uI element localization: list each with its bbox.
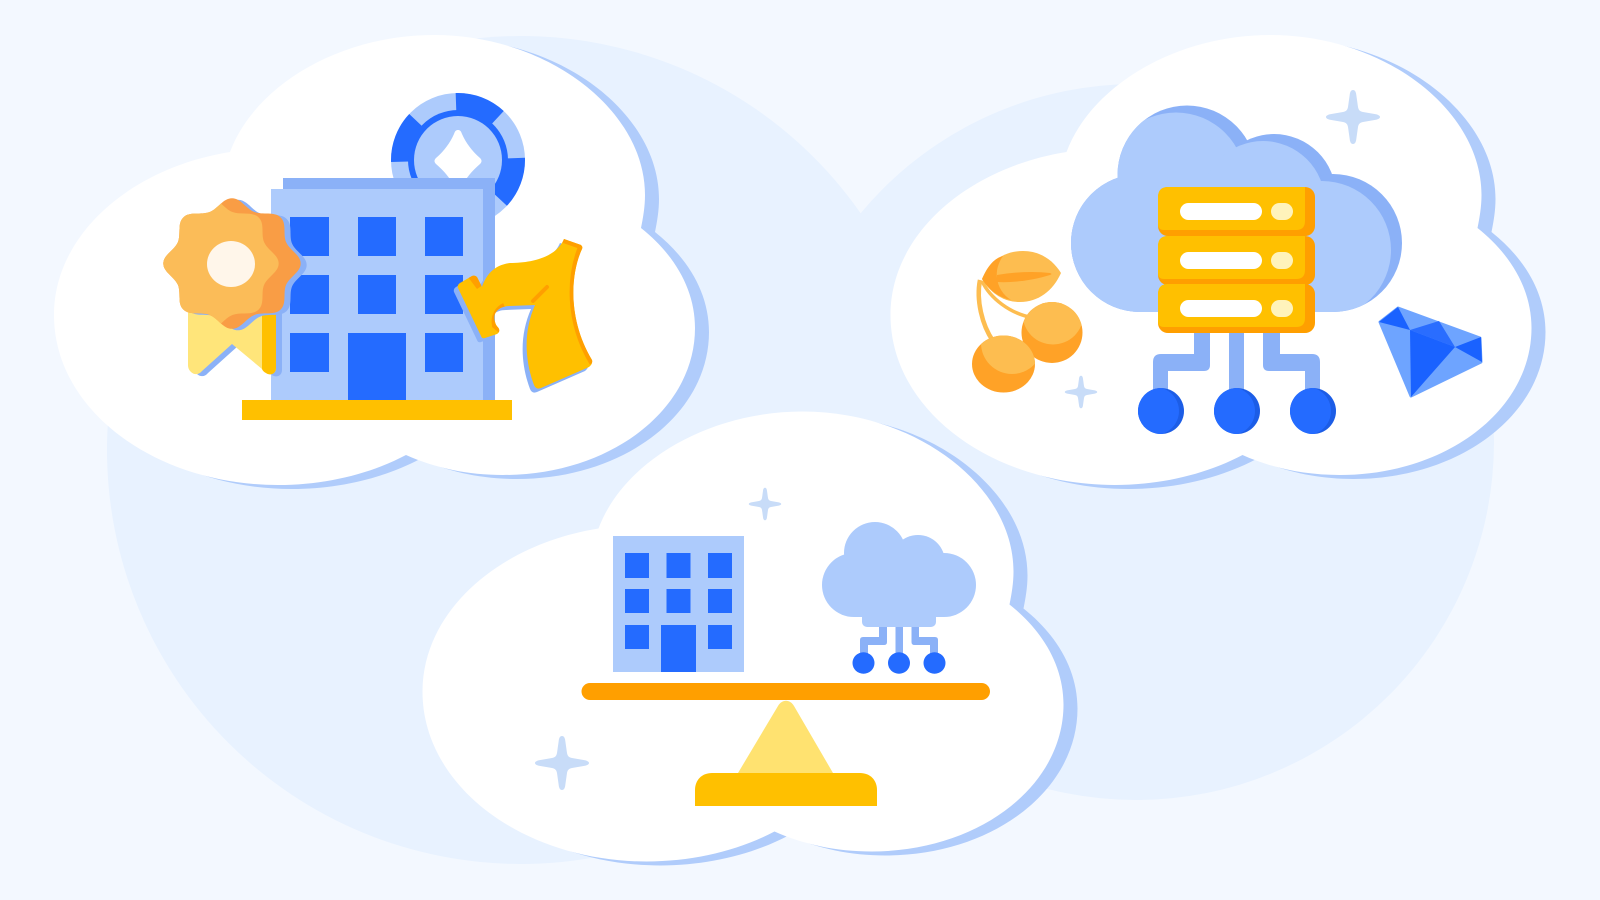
icon: building on scale — [613, 536, 744, 672]
icon: scale beam — [582, 683, 990, 700]
panel: cloud with building, chip, badge and seven — [54, 35, 709, 489]
cloud shape — [422, 412, 1078, 866]
panel: cloud with balance scale — [422, 412, 1078, 866]
icon: yellow seven — [454, 238, 594, 393]
icon: award badge — [163, 198, 307, 376]
icon: small sparkle — [1065, 376, 1097, 408]
icon: connector nodes — [1131, 387, 1336, 435]
background blob — [107, 36, 1494, 864]
icon: cherries — [972, 251, 1084, 392]
icon: scale fulcrum — [695, 701, 877, 806]
icon: office building — [242, 178, 512, 420]
icon: cloud behind server — [1060, 106, 1402, 323]
icon: server stack — [1158, 187, 1315, 333]
icon: upper sparkle — [749, 488, 781, 520]
icon: circuit connectors — [1153, 330, 1320, 400]
icon: large sparkle — [1326, 90, 1380, 144]
panel: cloud with server, cherries and diamond — [890, 35, 1546, 489]
cloud shape — [54, 35, 709, 489]
cloud shape — [890, 35, 1546, 489]
icon: small cloud on scale — [822, 522, 976, 674]
icon: casino chip — [391, 93, 525, 227]
icon: diamond — [1379, 307, 1482, 397]
icon: lower sparkle — [535, 736, 589, 790]
